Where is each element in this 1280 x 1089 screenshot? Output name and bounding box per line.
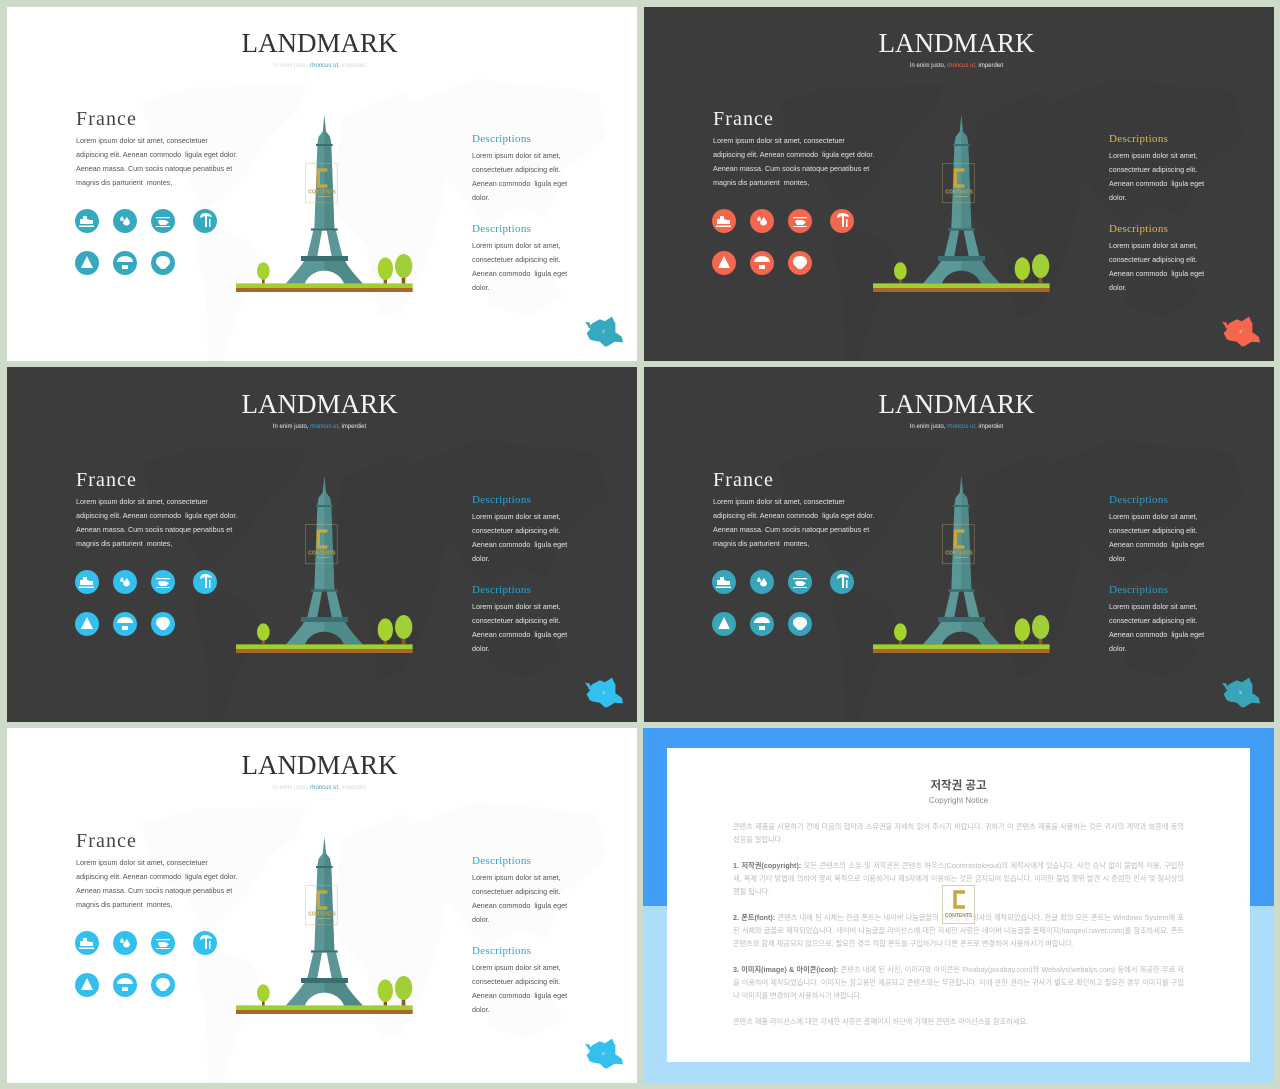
image and icon paragraph <box>733 965 1184 1000</box>
Descriptions text 1: Lorem ipsum dolor sit amet, consectetuer adipiscing elit. Aenean commodo ligula eget dolor. <box>1109 151 1204 202</box>
intro paragraph: 셨음을 알립니다. <box>733 835 783 844</box>
map badge with page number: 3 <box>1239 329 1242 334</box>
France body text: Lorem ipsum dolor sit amet, consectetuer adipiscing elit. Aenean commodo ligula eget dolor. Aenean massa. Cum sociis natoque penatibus et magnis dis parturient montes, <box>76 497 237 548</box>
heading: Descriptions 2: Descriptions <box>1109 223 1168 235</box>
heading: Descriptions 1: Descriptions <box>1109 494 1168 506</box>
Descriptions text 1: Lorem ipsum dolor sit amet, consectetuer adipiscing elit. Aenean commodo ligula eget dolor. <box>472 873 567 924</box>
Eiffel tower illustration <box>236 837 413 1014</box>
background world map <box>644 368 1274 722</box>
France body text: Lorem ipsum dolor sit amet, consectetuer adipiscing elit. Aenean commodo ligula eget dolor. Aenean massa. Cum sociis natoque penatibus et magnis dis parturient montes, <box>713 497 874 548</box>
gold watermark logo <box>942 885 975 924</box>
subtitle: In enim justo, rhoncus ut, imperdiet <box>273 424 366 430</box>
subtitle: In enim justo, rhoncus ut, imperdiet <box>273 785 366 791</box>
background world map <box>7 368 637 722</box>
Descriptions text 2: Lorem ipsum dolor sit amet, consectetuer adipiscing elit. Aenean commodo ligula eget dolor. <box>1109 602 1204 653</box>
heading: Descriptions 1: Descriptions <box>472 855 531 867</box>
Descriptions text 1: Lorem ipsum dolor sit amet, consectetuer adipiscing elit. Aenean commodo ligula eget dolor. <box>472 151 567 202</box>
icon grid <box>75 931 217 997</box>
Descriptions text 1: Lorem ipsum dolor sit amet, consectetuer adipiscing elit. Aenean commodo ligula eget dolor. <box>472 512 567 563</box>
subtitle: In enim justo, rhoncus ut, imperdiet <box>273 63 366 69</box>
map badge with page number <box>1222 678 1260 708</box>
copyright paragraph: 행될 됩니다. <box>733 887 770 896</box>
subtitle: In enim justo, rhoncus ut, imperdiet <box>910 424 1003 430</box>
heading: Descriptions 2: Descriptions <box>472 584 531 596</box>
slide 1: white teal <box>7 7 637 361</box>
heading: France: France <box>713 108 774 130</box>
background world map <box>644 7 1274 361</box>
heading: Descriptions 1: Descriptions <box>472 494 531 506</box>
title: LANDMARK <box>878 28 1034 58</box>
notice subtitle: Copyright Notice <box>929 796 988 805</box>
icon grid <box>712 570 854 636</box>
Descriptions text 2: Lorem ipsum dolor sit amet, consectetuer adipiscing elit. Aenean commodo ligula eget dolor. <box>472 963 567 1014</box>
map badge with page number <box>585 1038 623 1068</box>
France body text: Lorem ipsum dolor sit amet, consectetuer adipiscing elit. Aenean commodo ligula eget dolor. Aenean massa. Cum sociis natoque penatibus et magnis dis parturient montes, <box>713 136 874 187</box>
Eiffel tower illustration <box>873 476 1050 653</box>
heading: France: France <box>713 469 774 491</box>
heading: France: France <box>76 830 137 852</box>
background world map <box>7 729 637 1083</box>
Descriptions text 2: Lorem ipsum dolor sit amet, consectetuer adipiscing elit. Aenean commodo ligula eget dolor. <box>472 602 567 653</box>
font paragraph <box>733 913 1184 948</box>
heading: Descriptions 2: Descriptions <box>472 223 531 235</box>
map badge with page number <box>1222 316 1260 346</box>
title: LANDMARK <box>241 389 398 419</box>
map badge with page number: 4 <box>602 690 605 695</box>
intro paragraph <box>733 822 1184 844</box>
slide 3: dark sky blue <box>7 368 637 722</box>
France body text: Lorem ipsum dolor sit amet, consectetuer adipiscing elit. Aenean commodo ligula eget dolor. Aenean massa. Cum sociis natoque penatibus et magnis dis parturient montes, <box>76 858 237 909</box>
license note: 콘텐츠 제품 라이선스에 대한 자세한 사항은 홈페이지 하단에 기재된 콘텐츠 라이선스를 참조하세요. <box>733 1017 1028 1026</box>
icon grid <box>712 209 854 275</box>
map badge with page number: 2 <box>602 329 605 334</box>
gold watermark logo: CONTENTS <box>945 913 973 919</box>
heading: Descriptions 1: Descriptions <box>1109 133 1168 145</box>
copyright paragraph <box>733 861 1184 896</box>
heading: Descriptions 1: Descriptions <box>472 133 531 145</box>
icon grid <box>75 570 217 636</box>
title: LANDMARK <box>878 389 1034 419</box>
Descriptions text 1: Lorem ipsum dolor sit amet, consectetuer adipiscing elit. Aenean commodo ligula eget dolor. <box>1109 512 1204 563</box>
Eiffel tower illustration <box>236 115 413 292</box>
white notice panel <box>667 748 1250 1062</box>
heading: Descriptions 2: Descriptions <box>1109 584 1168 596</box>
Descriptions text 2: Lorem ipsum dolor sit amet, consectetuer adipiscing elit. Aenean commodo ligula eget dolor. <box>472 241 567 292</box>
background world map <box>7 7 637 361</box>
map badge with page number <box>585 316 623 346</box>
Eiffel tower illustration <box>873 115 1050 292</box>
map badge with page number: 5 <box>1239 690 1242 695</box>
Descriptions text 2: Lorem ipsum dolor sit amet, consectetuer adipiscing elit. Aenean commodo ligula eget dolor. <box>1109 241 1204 292</box>
slide 5: white sky blue <box>7 729 637 1083</box>
notice title: 저작권 공고 <box>930 780 987 792</box>
slide 4: dark teal <box>644 368 1274 722</box>
title: LANDMARK <box>241 28 398 58</box>
title: LANDMARK <box>241 750 398 780</box>
heading: Descriptions 2: Descriptions <box>472 945 531 957</box>
icon grid <box>75 209 217 275</box>
Eiffel tower illustration <box>236 476 413 653</box>
heading: France: France <box>76 469 137 491</box>
subtitle: In enim justo, rhoncus ut, imperdiet <box>910 63 1003 69</box>
font paragraph: 콘텐츠와 함께 제공되지 않으므로, 필요한 경우 적합 폰트를 구입하거나 다른 폰트로 변경하여 사용하시기 바랍니다. <box>733 939 1074 948</box>
map badge with page number: 6 <box>602 1051 605 1056</box>
slide 2: dark coral <box>644 7 1274 361</box>
France body text: Lorem ipsum dolor sit amet, consectetuer adipiscing elit. Aenean commodo ligula eget dolor. Aenean massa. Cum sociis natoque penatibus et magnis dis parturient montes, <box>76 136 237 187</box>
map badge with page number <box>585 678 623 708</box>
slide 6: copyright notice background <box>643 728 1274 1083</box>
image and icon paragraph: 나 이미지를 변경하여 사용하시기 바랍니다. <box>733 991 862 1000</box>
heading: France: France <box>76 108 137 130</box>
